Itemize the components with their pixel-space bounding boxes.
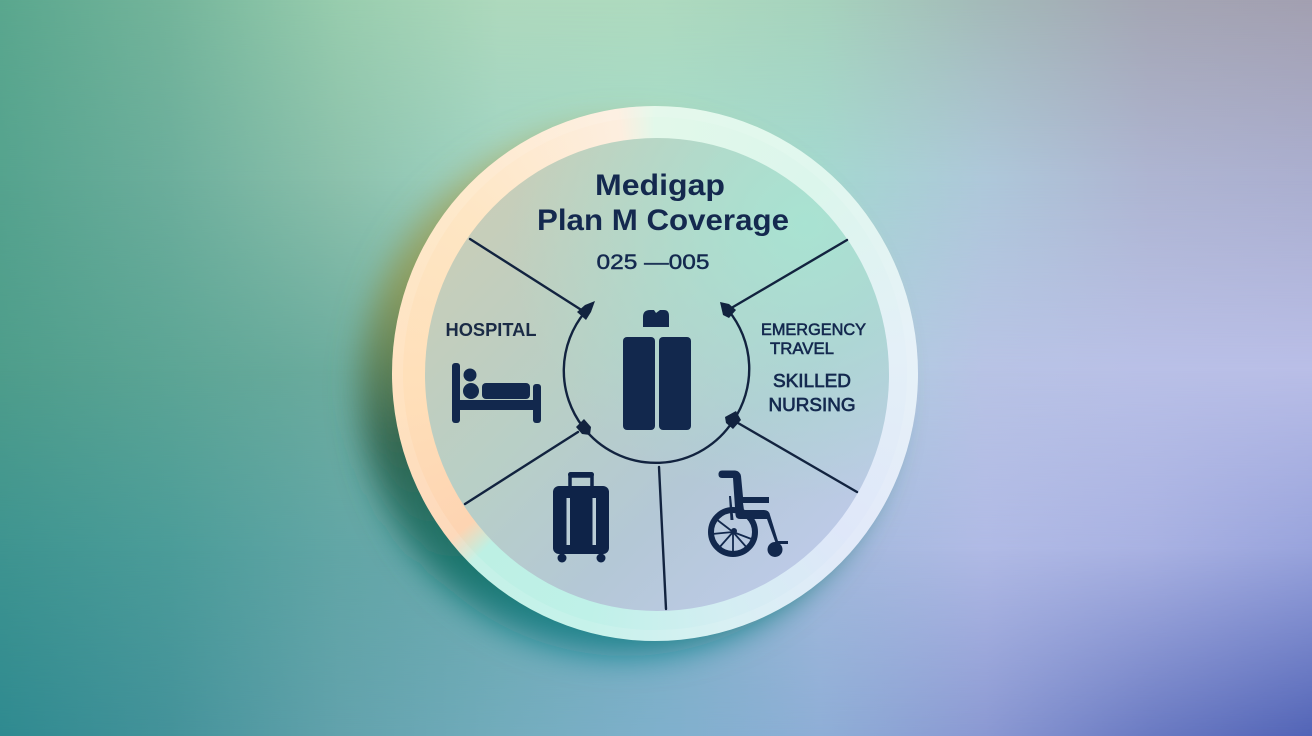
icon: luggage	[553, 472, 609, 562]
year range: 025 —005	[596, 251, 710, 274]
connector lines and hub arc	[465, 239, 857, 609]
icon: wheelchair	[711, 470, 788, 557]
labels: emergency travel	[761, 320, 866, 358]
labels: skilled nursing: NURSING	[768, 394, 856, 415]
title	[537, 169, 789, 237]
label: hospital: HOSPITAL	[446, 320, 536, 340]
labels: skilled nursing	[768, 370, 856, 415]
labels: emergency travel: EMERGENCY	[761, 320, 866, 339]
labels: emergency travel: TRAVEL	[770, 339, 834, 358]
inner disc	[425, 138, 889, 611]
hub nodes	[576, 301, 741, 435]
title: Plan M Coverage	[537, 204, 789, 237]
outer glass ring	[392, 106, 918, 641]
center icon: medigap card	[623, 310, 691, 430]
title: Medigap	[595, 169, 725, 202]
icon: hospital bed	[452, 363, 541, 423]
labels: skilled nursing: SKILLED	[773, 370, 851, 391]
